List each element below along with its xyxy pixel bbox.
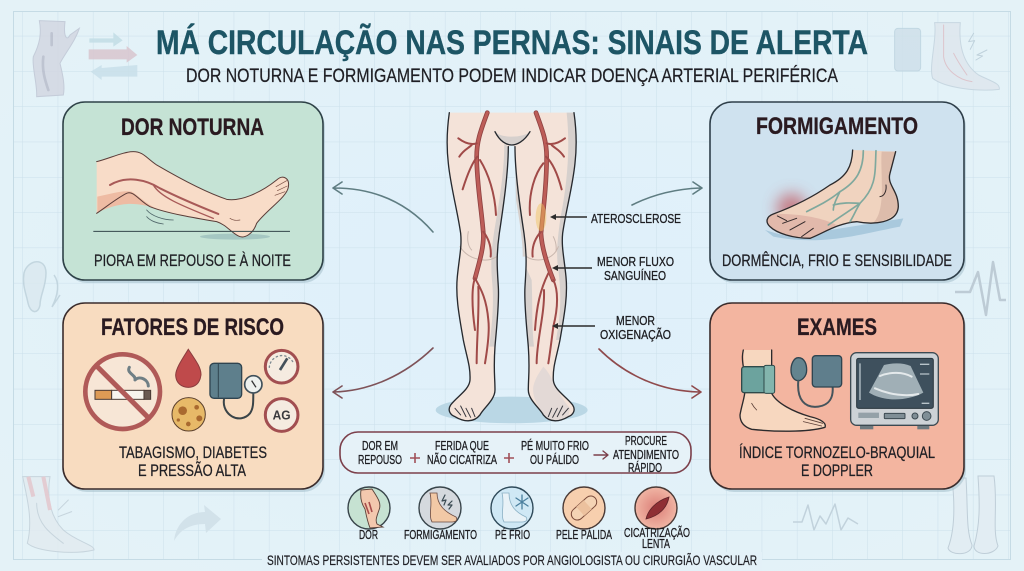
left leg arteries [458,113,496,363]
label: cicatrização lenta [624,526,690,551]
pill item: pé muito frio: PÉ MUITO FRIO [521,438,589,453]
icon: pé frio [491,487,533,529]
decorative heartbeat bottom [793,504,858,530]
caption: exames: ÍNDICE TORNOZELO-BRAQUIAL [739,443,935,462]
caption: exames: E DOPPLER [801,462,873,480]
arrow: to exames [599,349,701,398]
icons: risk factors [85,349,298,431]
illustration: legs with arteries [436,113,588,423]
label: aterosclerose [550,212,681,226]
decorative arrow bottom left [174,505,221,541]
label: menor oxigenação: MENOR [616,314,655,328]
arrow: to fatores de risco [333,348,433,398]
pill item: dor em repouso: REPOUSO [358,453,402,467]
arrow: to formigamento [632,182,702,205]
label: menor fluxo sanguíneo: SANGUÍNEO [604,268,666,283]
caption: fatores de risco [119,444,267,480]
caption: dor noturna: PIORA EM REPOUSO E À NOITE [94,251,291,270]
pill item: procure atendimento [613,434,679,475]
arrow [594,451,608,459]
plus [504,453,514,463]
label: menor oxigenação [552,314,671,342]
decorative icon: leg bottom left [23,477,94,552]
panel: exames [710,303,966,492]
panel: dor noturna [63,102,325,283]
caption: fatores de risco: TABAGISMO, DIABETES [119,444,267,462]
arrow: to dor noturna [333,182,433,232]
caption: fatores de risco: E PRESSÃO ALTA [138,460,246,480]
label: aterosclerose: ATEROSCLEROSE [591,212,681,226]
illustration: leg at rest [93,152,290,240]
icon: dor [348,487,390,529]
decorative icon: legs bottom right [948,476,998,554]
pill item: ferida que não cicatriza: NÃO CICATRIZA [427,453,497,467]
footer note: SINTOMAS PERSISTENTES DEVEM SER AVALIADOS POR ANGIOLOGISTA OU CIRURGIÃO VASCULAR [267,552,757,568]
pill item: pé muito frio [521,438,589,467]
plus [410,453,420,463]
pill item: procure atendimento: RÁPIDO [628,460,662,475]
pill item: procure atendimento: ATENDIMENTO [613,448,679,462]
illustration: foot with nerves [765,150,903,240]
decorative icon: cuff and foot top right [895,23,999,90]
heading: exames: EXAMES [797,314,877,341]
caption: exames [739,443,935,480]
label: cicatrização lenta: CICATRIZAÇÃO [624,526,690,540]
heading: formigamento: FORMIGAMENTO [756,113,918,140]
right leg arteries [530,113,565,363]
panel: formigamento [710,102,966,283]
label: menor oxigenação: OXIGENAÇÃO [600,328,671,342]
icon: cicatrização lenta [635,487,677,529]
pill item: dor em repouso: DOR EM [362,439,398,453]
title: MÁ CIRCULAÇÃO NAS PERNAS: SINAIS DE ALERTA [156,24,868,62]
warning pill [340,432,691,475]
subtitle: DOR NOTURNA E FORMIGAMENTO PODEM INDICAR DOENÇA ARTERIAL PERIFÉRICA [186,64,838,87]
caption: formigamento: DORMÊNCIA, FRIO E SENSIBILIDADE [722,251,952,270]
heading: fatores de risco: FATORES DE RISCO [101,314,284,341]
illustration: ankle brachial and doppler [740,350,938,431]
decorative icon: heartbeat right [955,262,1006,315]
icon: formigamento [419,487,461,529]
label: pele pálida: PELE PÁLIDA [556,527,612,542]
label: menor fluxo sanguíneo: MENOR FLUXO [597,255,674,269]
label: cicatrização lenta: LENTA [642,537,670,551]
icons: risk factors: AG [273,409,291,423]
panel: fatores de risco [63,303,325,492]
decorative icon: artery top left [33,21,137,97]
pill item: ferida que não cicatriza [427,439,497,467]
label: menor fluxo sanguíneo [552,255,674,283]
label: pé frio: PÉ FRIO [495,527,530,542]
pill item: procure atendimento: PROCURE [625,434,667,448]
pill item: pé muito frio: OU PÁLIDO [530,452,579,467]
label: formigamento: FORMIGAMENTO [404,528,477,542]
label: dor: DOR [359,528,378,542]
heading: dor noturna: DOR NOTURNA [121,114,264,141]
pill item: dor em repouso [358,439,402,467]
icon: pele pálida [563,487,605,529]
pill item: ferida que não cicatriza: FERIDA QUE [435,439,489,453]
decorative icon: footprints left [23,262,60,312]
